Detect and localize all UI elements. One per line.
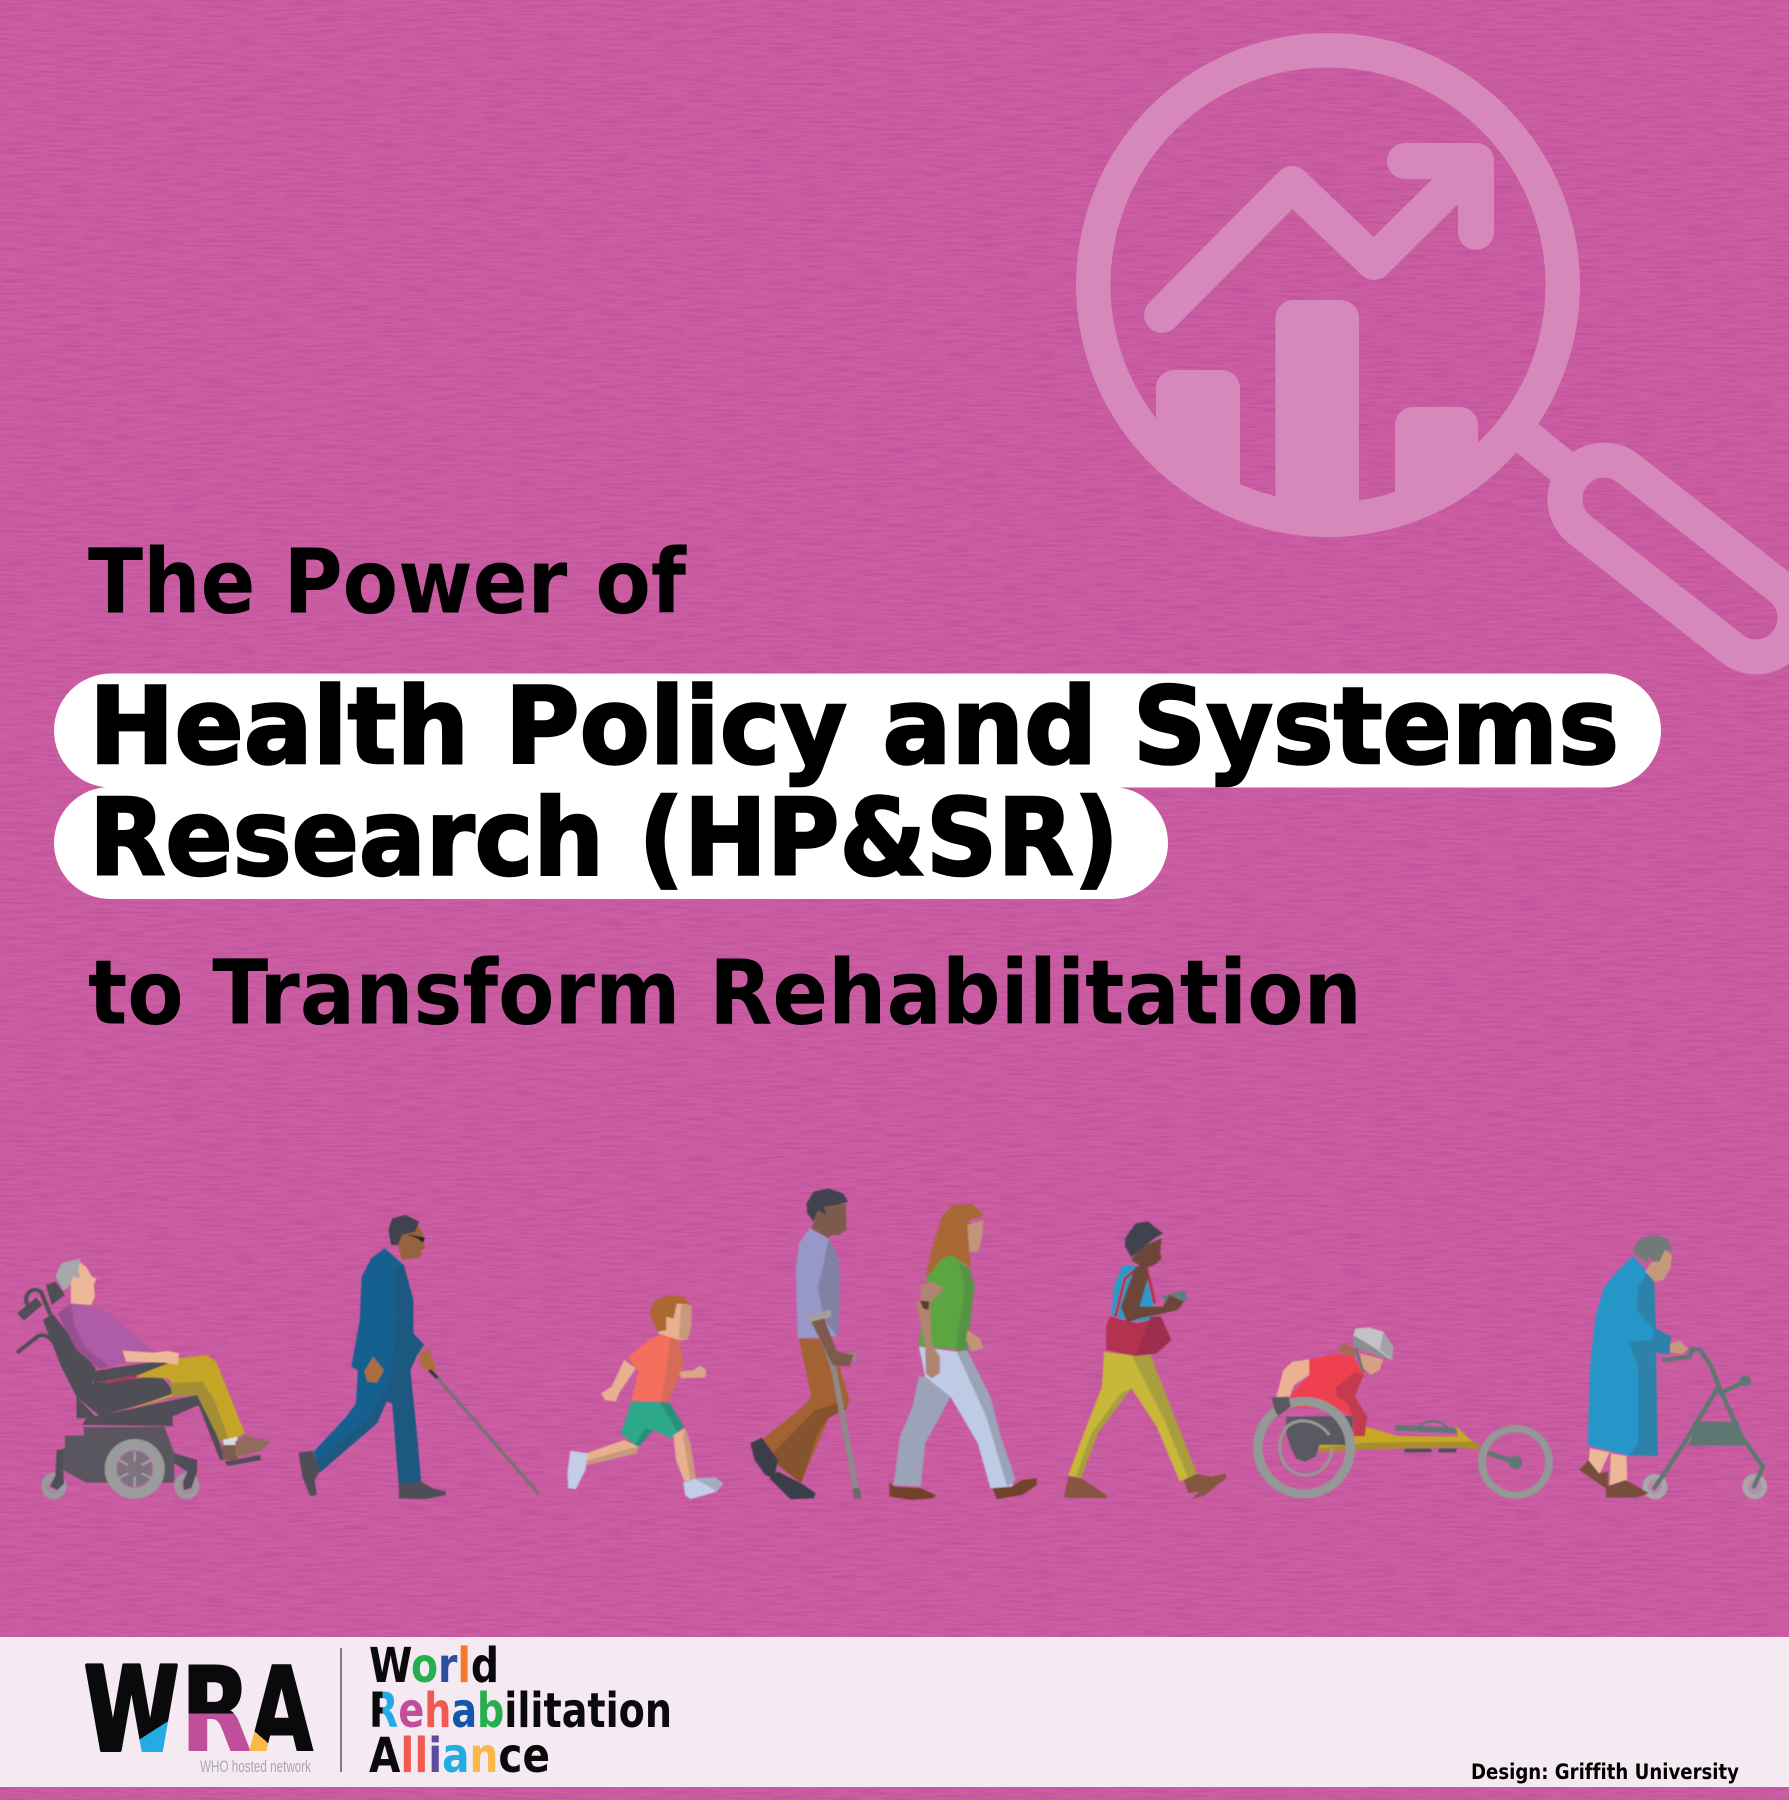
highlighted title block — [54, 665, 1661, 900]
arms — [601, 1360, 706, 1402]
illustration: older woman with rollator — [1579, 1235, 1767, 1499]
coat — [1588, 1256, 1671, 1456]
head — [55, 1258, 96, 1305]
illustration: man with white cane — [299, 1215, 539, 1499]
footer band — [0, 1637, 1789, 1787]
letter R: R — [181, 1643, 251, 1778]
letter W: W — [84, 1643, 179, 1778]
logo divider — [340, 1648, 342, 1772]
trousers — [894, 1347, 1016, 1488]
trousers — [1068, 1352, 1197, 1482]
white pill: line 1 — [54, 674, 1661, 788]
shirt — [919, 1255, 974, 1352]
cane — [431, 1370, 539, 1494]
head — [1125, 1222, 1163, 1268]
leg and trousers — [126, 1355, 271, 1460]
head — [649, 1295, 692, 1340]
logo: World Rehabilitation Alliance wordmark — [369, 1638, 672, 1784]
shoes — [750, 1438, 816, 1499]
title line: The Power of: The Power of — [88, 530, 687, 634]
glove — [1272, 1397, 1291, 1416]
shirt — [796, 1228, 840, 1338]
face — [967, 1220, 983, 1252]
title line: Research (HP&SR): Research (HP&SR) — [89, 776, 1119, 900]
cane grip — [429, 1370, 437, 1378]
illustration: man with crutch — [750, 1188, 861, 1499]
seat — [1286, 1416, 1353, 1462]
main wheel — [105, 1439, 165, 1499]
head — [388, 1215, 425, 1260]
magnifier neck — [1526, 437, 1564, 468]
legs — [1588, 1448, 1627, 1487]
shoes — [299, 1451, 446, 1499]
crutch — [805, 1309, 861, 1499]
shoes — [1064, 1473, 1226, 1499]
word: World: World — [369, 1638, 499, 1694]
top — [1111, 1265, 1153, 1322]
shoes — [1579, 1460, 1649, 1498]
bag — [1106, 1266, 1171, 1356]
arm and phone — [1121, 1267, 1187, 1323]
athlete body — [1276, 1343, 1383, 1437]
word: Alliance: Alliance — [369, 1728, 550, 1784]
wheels — [41, 1473, 199, 1499]
logo: WRA mark — [84, 1643, 313, 1778]
torso — [57, 1303, 179, 1384]
rollator wheels — [1642, 1474, 1767, 1499]
tagline: WHO hosted network — [200, 1757, 311, 1776]
head — [806, 1188, 848, 1238]
rear wheel — [1258, 1401, 1350, 1494]
letter A: A — [250, 1643, 313, 1778]
helmet — [1353, 1327, 1393, 1373]
head — [1632, 1235, 1673, 1282]
racing frame — [1319, 1421, 1515, 1462]
magnifier lens ring — [1076, 33, 1580, 537]
arm — [811, 1318, 854, 1367]
trousers — [762, 1338, 849, 1483]
magnifier handle — [1549, 444, 1789, 673]
rollator basket — [1688, 1376, 1751, 1446]
front wheel — [1482, 1429, 1549, 1495]
bar chart bars — [1156, 300, 1478, 502]
word: Rehabilitation: Rehabilitation — [369, 1683, 672, 1739]
shoes — [567, 1451, 723, 1499]
illustration: woman with shoulder bag and phone — [1064, 1222, 1226, 1499]
arms and hands — [916, 1282, 983, 1378]
title line: to Transform Rehabilitation: to Transform Rehabilitation — [88, 940, 1362, 1044]
illustration: woman walking with bionic arm — [889, 1204, 1037, 1500]
illustration: man in powered wheelchair — [17, 1258, 271, 1499]
rollator frame — [1654, 1349, 1763, 1488]
illustration: racing wheelchair athlete — [1258, 1327, 1549, 1495]
shoes — [889, 1478, 1037, 1500]
wheelchair frame — [17, 1282, 261, 1490]
shorts — [621, 1402, 684, 1447]
hair — [925, 1204, 984, 1277]
trend arrow — [1162, 161, 1476, 315]
white pill: line 2 — [54, 787, 1168, 899]
legs — [586, 1428, 696, 1482]
shirt — [628, 1335, 684, 1402]
suit — [314, 1248, 424, 1485]
icon: magnifying glass with chart — [1076, 33, 1789, 673]
title line: Health Policy and Systems: Health Policy and Systems — [89, 665, 1619, 788]
hand — [1670, 1341, 1688, 1354]
credit: design: Design: Griffith University — [1471, 1760, 1739, 1784]
illustration: running child — [567, 1295, 723, 1499]
hands — [364, 1348, 436, 1383]
